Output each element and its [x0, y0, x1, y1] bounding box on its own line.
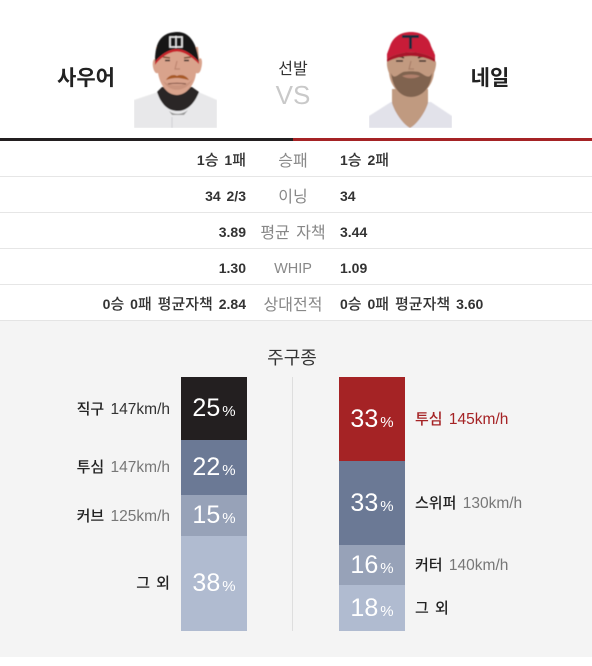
icon: right pitcher portrait: [369, 31, 452, 128]
row 2 right value: 34: [340, 188, 356, 204]
row 1 left value: 1승 1패: [197, 152, 246, 169]
header: right pitcher name: 네일: [471, 67, 509, 90]
row 3 right value: 3.44: [340, 224, 367, 240]
left bar: 15% curve: 15%: [192, 501, 236, 529]
right bar: 16% cutter: 16%: [350, 551, 394, 579]
right bar: 33% two-seam: [339, 377, 405, 461]
row 1 right value: 1승 2패: [340, 152, 389, 169]
header: left pitcher name: 사우어: [57, 67, 115, 90]
row 5 left value: 0승 0패 평균자책 2.84: [103, 296, 246, 313]
right bar: 33% sweeper: [339, 461, 405, 545]
match label: VS: VS: [276, 80, 310, 110]
team colour bar: left: [0, 138, 293, 141]
right label: 그 외: 그 외: [415, 600, 449, 617]
right label: 투심: 투심 145km/h: [415, 411, 508, 428]
right label: 커터: 커터 140km/h: [415, 557, 508, 574]
match label: starting pitchers: 선발: [278, 61, 308, 78]
right bar: 18% other: [339, 585, 405, 631]
right bar: 16% cutter: [339, 545, 405, 585]
left bar: 15% curve: [181, 495, 247, 536]
left bar: 38% other: 38%: [192, 569, 236, 597]
row 5 right value: 0승 0패 평균자책 3.60: [340, 296, 483, 313]
stats table: [0, 152, 592, 314]
icon: left pitcher portrait: [134, 31, 217, 128]
left bar: 22% two-seam: [181, 440, 247, 495]
row 2 left value: 34 2/3: [205, 188, 246, 204]
left bar: 25% four-seam: [181, 377, 247, 440]
right label: 스위퍼: 스위퍼 130km/h: [415, 495, 522, 512]
row 3 left value: 3.89: [219, 224, 246, 240]
left label: 그 외: 그 외: [136, 575, 170, 592]
row 2 label: 이닝: [278, 189, 308, 206]
left label: 직구: 직구 147km/h: [77, 401, 170, 418]
panel: pitch mix: [0, 320, 592, 657]
right bar: 33% two-seam: 33%: [350, 405, 394, 433]
right bar: 33% sweeper: 33%: [350, 489, 394, 517]
left label: 투심: 투심 147km/h: [77, 459, 170, 476]
right stacked bar: [339, 377, 405, 631]
left stacked bar: [181, 377, 247, 631]
left bar: 22% two-seam: 22%: [192, 453, 236, 481]
row 4 left value: 1.30: [219, 260, 246, 276]
left bar: 38% other: [181, 536, 247, 631]
pitch mix heading: 주구종: [267, 348, 317, 368]
row 3 label: 평균 자책: [260, 225, 326, 242]
right bar: 18% other: 18%: [350, 594, 394, 622]
team colour bar: right: [293, 138, 592, 141]
row 5 label: 상대전적: [264, 297, 322, 314]
row 1 label: 승패: [278, 153, 308, 170]
left bar: 25% four-seam: 25%: [192, 394, 236, 422]
left label: 커브: 커브 125km/h: [77, 508, 170, 525]
row 4 label: WHIP: [274, 261, 312, 277]
row 4 right value: 1.09: [340, 260, 367, 276]
